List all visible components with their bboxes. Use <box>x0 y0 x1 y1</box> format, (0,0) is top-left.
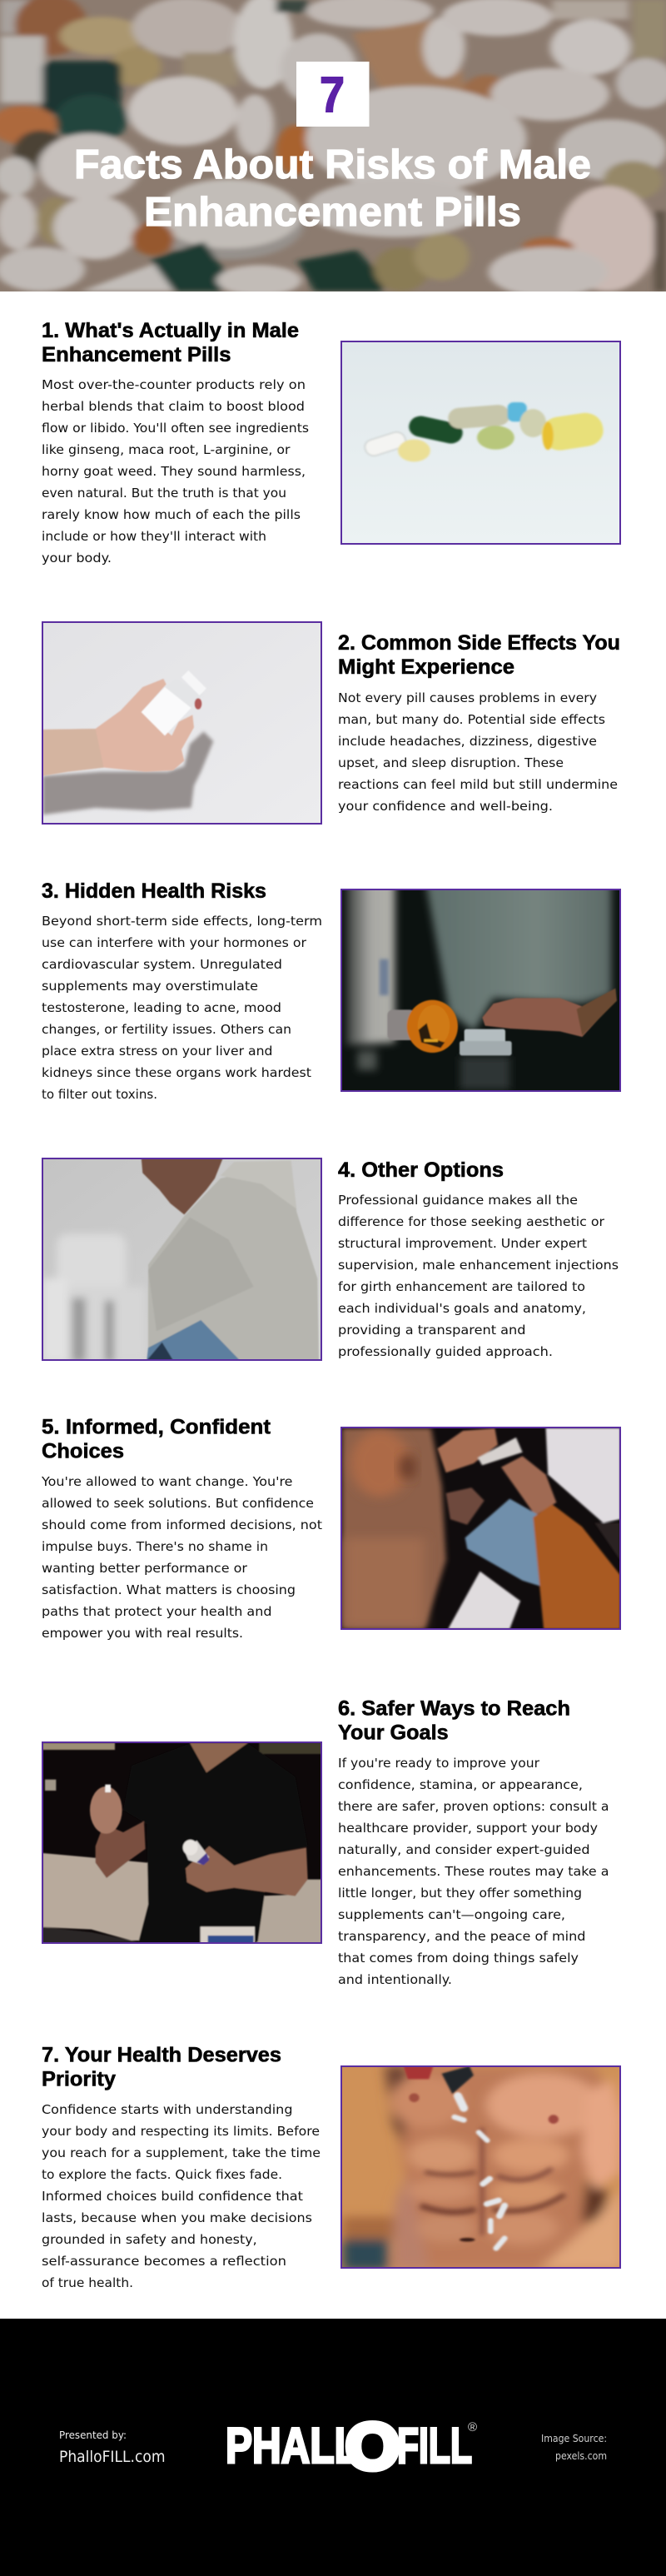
text block: transparency, and the peace of mind <box>338 1930 586 1944</box>
text block: each individual's goals and anatomy, <box>338 1302 586 1316</box>
text block: rarely know how much of each the pills <box>42 508 301 522</box>
text block: should come from informed decisions, not <box>42 1518 322 1532</box>
text block: like ginseng, maca root, L-arginine, or <box>42 443 291 457</box>
text block: kidneys since these organs work hardest <box>42 1066 311 1080</box>
heading: Enhancement Pills <box>42 343 231 366</box>
text block: paths that protect your health and <box>42 1605 271 1619</box>
text block: naturally, and consider expert-guided <box>338 1843 589 1857</box>
text block: You're allowed to want change. You're <box>41 1475 293 1489</box>
image source: Image Source: <box>541 2432 607 2444</box>
text block: to explore the facts. Quick fixes fade. <box>42 2168 282 2182</box>
heading: 6. Safer Ways to Reach <box>338 1697 570 1721</box>
photo: pills falling over torso <box>340 2065 622 2270</box>
hero banner <box>0 0 666 297</box>
text block: flow or libido. You'll often see ingredients <box>42 421 309 436</box>
text block: your body and respecting its limits. Before <box>42 2125 320 2139</box>
text block: Beyond short-term side effects, long-term <box>42 914 322 929</box>
heading <box>338 1697 570 1744</box>
heading: 3. Hidden Health Risks <box>42 879 266 903</box>
text block: testosterone, leading to acne, mood <box>42 1001 281 1015</box>
footer <box>0 2319 666 2576</box>
text block: wanting better performance or <box>42 1562 248 1576</box>
heading: 4. Other Options <box>338 1158 504 1182</box>
text block: healthcare provider, support your body <box>338 1821 598 1836</box>
text block: there are safer, proven options: consult a <box>338 1800 609 1814</box>
text block: empower you with real results. <box>42 1627 243 1641</box>
text block: supervision, male enhancement injections <box>338 1258 619 1273</box>
heading: 5. Informed, Confident <box>42 1416 271 1439</box>
text block: little longer, but they offer something <box>338 1886 582 1901</box>
text block: satisfaction. What matters is choosing <box>42 1583 296 1597</box>
panel: fact 1 <box>42 319 621 566</box>
text block: place extra stress on your liver and <box>42 1044 273 1059</box>
text block: reactions can feel mild but still undermine <box>338 778 618 792</box>
text block: and intentionally. <box>338 1973 452 1987</box>
presented by: Presented by: <box>59 2429 127 2441</box>
photo: man holding pill and bottle <box>42 1741 322 1944</box>
text block <box>338 1756 609 1987</box>
title: Enhancement Pills <box>144 190 521 235</box>
image source: pexels.com <box>555 2449 607 2462</box>
text block: Most over-the-counter products rely on <box>42 378 306 392</box>
text block: Not every pill causes problems in every <box>338 691 597 705</box>
heading: Priority <box>42 2067 116 2090</box>
heading: 1. What's Actually in Male <box>42 319 299 342</box>
panel: fact 7 <box>42 2044 622 2290</box>
panel: fact 6 <box>42 1697 609 1987</box>
text block: structural improvement. Under expert <box>338 1237 587 1251</box>
logo: O <box>345 2409 400 2483</box>
text block: confidence, stamina, or appearance, <box>338 1778 583 1792</box>
image source <box>541 2432 607 2462</box>
text block: use can interfere with your hormones or <box>42 936 307 950</box>
panel: fact 3 <box>42 873 621 1102</box>
text block: to filter out toxins. <box>42 1088 157 1102</box>
text block: Professional guidance makes all the <box>338 1193 578 1208</box>
heading: 2. Common Side Effects You <box>338 631 620 655</box>
text block: for girth enhancement are tailored to <box>338 1280 585 1294</box>
text block: that comes from doing things safely <box>338 1951 579 1966</box>
text block: difference for those seeking aesthetic or <box>338 1215 605 1229</box>
text block: If you're ready to improve your <box>338 1756 540 1771</box>
heading <box>42 319 299 366</box>
text block: cardiovascular system. Unregulated <box>42 958 282 972</box>
panel: fact 2 <box>42 621 620 825</box>
heading: Might Experience <box>338 655 514 679</box>
text block: herbal blends that claim to boost blood <box>42 400 305 414</box>
logo: ® <box>468 2420 477 2434</box>
text block: Informed choices build confidence that <box>42 2190 303 2204</box>
heading <box>42 1416 271 1462</box>
text block: include or how they'll interact with <box>42 530 266 544</box>
text block: providing a transparent and <box>338 1323 526 1338</box>
photo: man in hoodie <box>42 1158 322 1362</box>
text block: professionally guided approach. <box>338 1345 553 1359</box>
text block: grounded in safety and honesty, <box>42 2233 257 2247</box>
heading <box>42 2044 281 2090</box>
text block <box>338 1193 619 1359</box>
photo: assorted pills <box>340 341 621 545</box>
presented by: PhalloFILL.com <box>59 2448 165 2466</box>
text block: self-assurance becomes a reflection <box>42 2255 286 2269</box>
heading: 7. Your Health Deserves <box>42 2044 281 2067</box>
text block: supplements can't—ongoing care, <box>338 1908 565 1922</box>
text block: man, but many do. Potential side effects <box>338 713 605 727</box>
text block <box>41 1475 322 1641</box>
text block: changes, or fertility issues. Others can <box>42 1023 291 1037</box>
photo: hand holding bottle <box>42 621 322 825</box>
text block <box>42 914 322 1102</box>
photo: spilled prescription bottle <box>340 873 621 1092</box>
text block: allowed to seek solutions. But confidence <box>42 1497 314 1511</box>
number badge: 7 <box>320 67 345 122</box>
title: Facts About Risks of Male <box>74 142 591 187</box>
text block: Confidence starts with understanding <box>42 2103 293 2117</box>
heading: Choices <box>42 1439 124 1462</box>
hero photo: pile of pills <box>0 0 666 297</box>
presented by <box>59 2429 165 2466</box>
logo <box>226 2409 477 2483</box>
text block: impulse buys. There's no shame in <box>42 1540 268 1554</box>
heading: Your Goals <box>338 1721 449 1744</box>
text block <box>338 691 618 814</box>
text block: horny goat weed. They sound harmless, <box>42 465 306 479</box>
text block: of true health. <box>42 2276 133 2290</box>
text block: upset, and sleep disruption. These <box>338 756 564 770</box>
panel: fact 4 <box>42 1158 619 1362</box>
logo: PHALL <box>226 2418 359 2474</box>
text block: supplements may overstimulate <box>42 979 258 994</box>
text block: include headaches, dizziness, digestive <box>338 735 597 749</box>
photo: men with blister pack <box>340 1427 621 1630</box>
text block <box>42 378 309 566</box>
text block: your confidence and well-being. <box>338 800 553 814</box>
text block: lasts, because when you make decisions <box>42 2211 312 2225</box>
heading <box>338 631 620 679</box>
logo: FILL <box>397 2418 472 2474</box>
text block: enhancements. These routes may take a <box>338 1865 609 1879</box>
title <box>74 142 591 235</box>
text block: you reach for a supplement, take the time <box>42 2146 321 2160</box>
number badge <box>296 62 370 127</box>
text block: even natural. But the truth is that you <box>42 486 286 501</box>
text block <box>42 2103 321 2290</box>
panel: fact 5 <box>41 1416 621 1641</box>
text block: your body. <box>42 551 112 566</box>
